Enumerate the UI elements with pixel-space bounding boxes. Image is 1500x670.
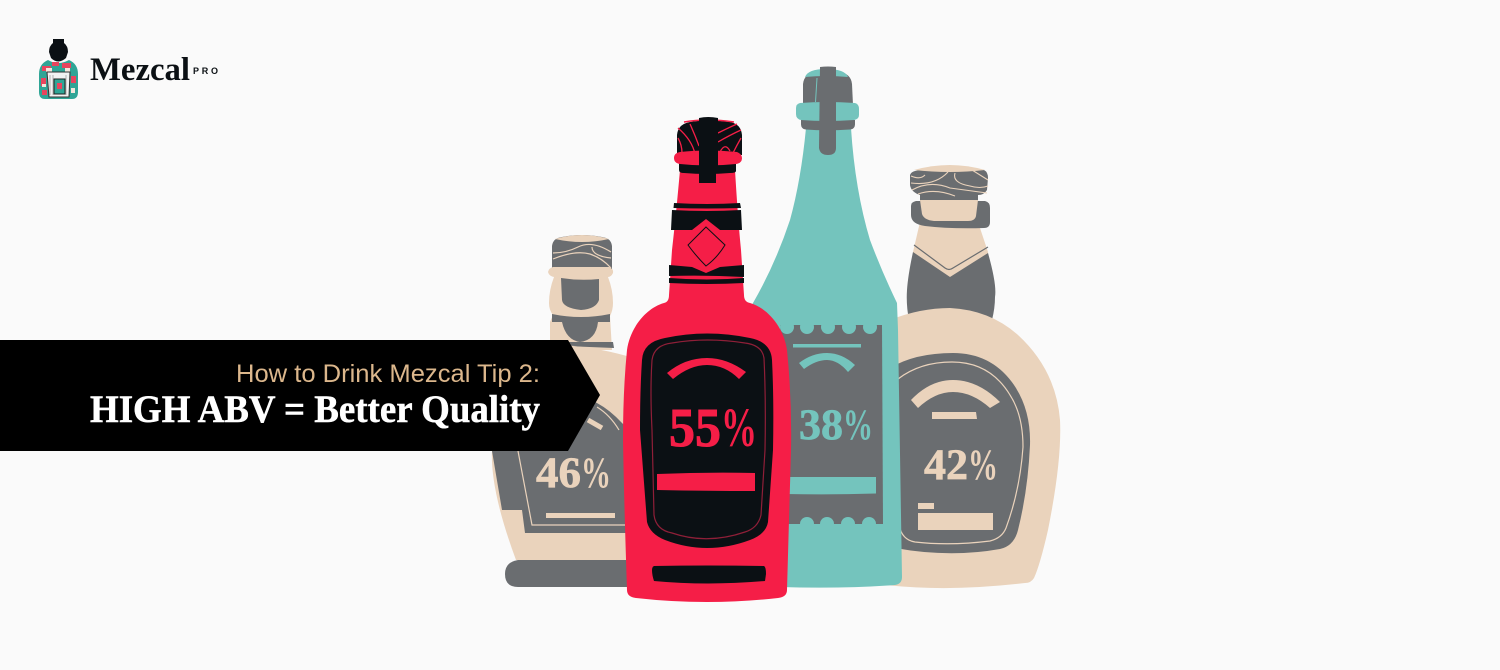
right bottle large bar — [918, 513, 993, 530]
teal bottle percentage: 38% — [799, 402, 873, 449]
banner shape — [0, 340, 600, 451]
red bottle bar — [657, 473, 755, 491]
bottle: 38% teal — [740, 66, 902, 588]
bottle: 42% beige right — [885, 165, 1060, 588]
left bottle label inner line — [518, 407, 640, 525]
teal bottle arc — [799, 353, 855, 372]
left bottle neck and cap — [548, 235, 614, 350]
red bottle label inner line — [651, 340, 765, 539]
left bottle arc tick — [588, 420, 602, 428]
right bottle body — [885, 308, 1060, 588]
left bottle bar — [546, 513, 615, 518]
red bottle diamond — [688, 227, 725, 266]
teal bottle cap — [796, 66, 859, 155]
red bottle neck bands — [669, 203, 744, 284]
right bottle label inner line — [898, 362, 1023, 544]
left bottle label — [492, 392, 640, 533]
right bottle label — [890, 353, 1030, 553]
red bottle bottom bar — [652, 566, 766, 584]
left bottle base — [505, 560, 640, 587]
red bottle cap — [674, 117, 742, 183]
right bottle percentage: 42% — [924, 442, 998, 489]
left bottle percentage: 46% — [536, 450, 611, 497]
right bottle arc — [911, 380, 1000, 408]
red bottle arc — [667, 358, 746, 379]
bottle: 55% red — [623, 117, 791, 602]
banner headline: HIGH ABV = Better Quality — [90, 388, 540, 431]
teal bottle bar — [785, 477, 876, 494]
logo wordmark: Mezcal — [90, 52, 190, 88]
red bottle percentage: 55% — [669, 397, 757, 458]
left bottle body — [492, 345, 640, 565]
teal bottle line — [793, 344, 861, 348]
bottle: 46% beige left — [492, 235, 640, 587]
red bottle label — [640, 334, 773, 548]
red bottle body — [623, 170, 791, 602]
right bottle cap — [910, 165, 990, 228]
icon: logo bottle — [39, 39, 78, 99]
teal bottle label — [780, 320, 883, 531]
banner subtitle: How to Drink Mezcal Tip 2: — [236, 360, 540, 388]
banner — [0, 340, 600, 451]
teal bottle body — [740, 128, 902, 588]
logo PRO mark: PRO — [193, 66, 218, 76]
right bottle neck — [907, 222, 995, 320]
right bottle top bar — [932, 412, 977, 419]
logo: Mezcal Pro — [39, 39, 218, 99]
right bottle small bar — [918, 503, 934, 509]
